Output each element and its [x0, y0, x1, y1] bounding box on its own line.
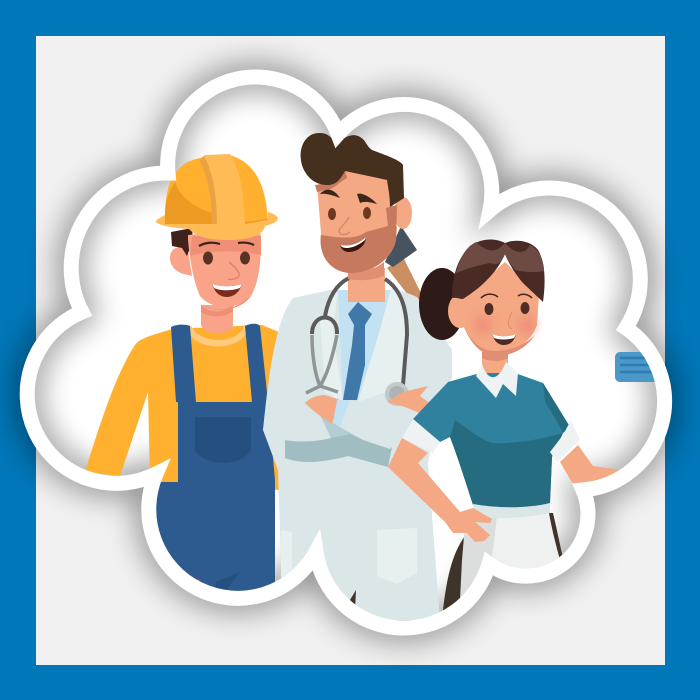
- hard hat: [156, 154, 278, 240]
- waistband: [473, 503, 550, 518]
- people clipped to the cloud: [85, 133, 675, 625]
- teal dress: [413, 373, 570, 509]
- left arm and hand: [388, 438, 492, 542]
- collar: [476, 362, 518, 398]
- cloud white base: [27, 77, 665, 628]
- worker body: [85, 303, 280, 600]
- bun and neck: [419, 268, 508, 380]
- worker head: [170, 228, 261, 310]
- lab coat: [263, 288, 452, 620]
- doctor head: [301, 133, 412, 280]
- figure: doctor: [263, 133, 452, 620]
- cuffs: [402, 419, 580, 462]
- cloud white outline: [27, 77, 665, 628]
- icon: blue sign: [615, 352, 655, 382]
- tie: [343, 302, 372, 400]
- nurse head: [448, 240, 545, 356]
- figure: construction worker: [85, 154, 280, 600]
- neck: [348, 268, 385, 302]
- hammer behind doctor: [385, 228, 420, 300]
- cloud soft shadow: [27, 77, 665, 628]
- right arm: [560, 445, 622, 484]
- skirt and apron: [443, 512, 562, 610]
- stethoscope: [306, 278, 407, 404]
- figure: nurse: [388, 240, 622, 625]
- crossed arms: [263, 386, 431, 449]
